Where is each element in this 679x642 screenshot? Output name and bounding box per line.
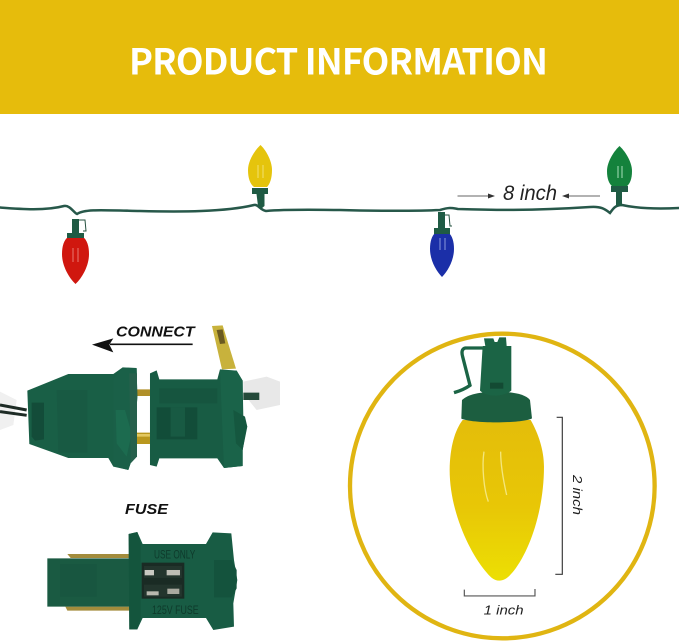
panel: bulb detail circle — [350, 334, 655, 638]
fuse label: FUSE — [125, 502, 169, 518]
circle ring — [350, 334, 655, 638]
yellow bulb — [248, 145, 272, 209]
red bulb — [62, 219, 89, 284]
socket body — [150, 369, 247, 468]
fuse socket — [47, 532, 237, 630]
dimension: 2 inch — [555, 417, 584, 574]
connect label with arrow — [92, 325, 196, 352]
pins — [127, 389, 259, 444]
dimension: 1 inch — [464, 589, 535, 618]
title: PRODUCT INFORMATION — [129, 34, 548, 86]
bulb glass — [450, 420, 544, 581]
pins — [67, 554, 130, 558]
wires — [0, 405, 27, 415]
green cap — [461, 391, 532, 422]
fuse window — [142, 563, 184, 599]
label tag and paper — [0, 325, 280, 430]
fuse socket: 125V FUSE — [152, 603, 199, 617]
dimension: 2 inch: 2 inch — [570, 474, 584, 515]
blue bulb — [430, 212, 454, 277]
green bulb — [607, 146, 632, 206]
hanging clip — [454, 348, 483, 393]
connect label with arrow: CONNECT — [116, 325, 196, 341]
moulded text: USE ONLY — [154, 548, 195, 562]
light string wire — [0, 205, 679, 214]
large yellow bulb — [450, 337, 544, 581]
dimension: 8 inch — [458, 182, 600, 205]
housing — [47, 532, 237, 630]
socket stem — [480, 337, 511, 396]
dimension: 8 inch: 8 inch — [503, 182, 557, 205]
dimension: 1 inch: 1 inch — [484, 604, 524, 618]
plug body — [27, 367, 137, 470]
banner — [0, 0, 679, 114]
connector: plug and socket — [0, 325, 280, 470]
